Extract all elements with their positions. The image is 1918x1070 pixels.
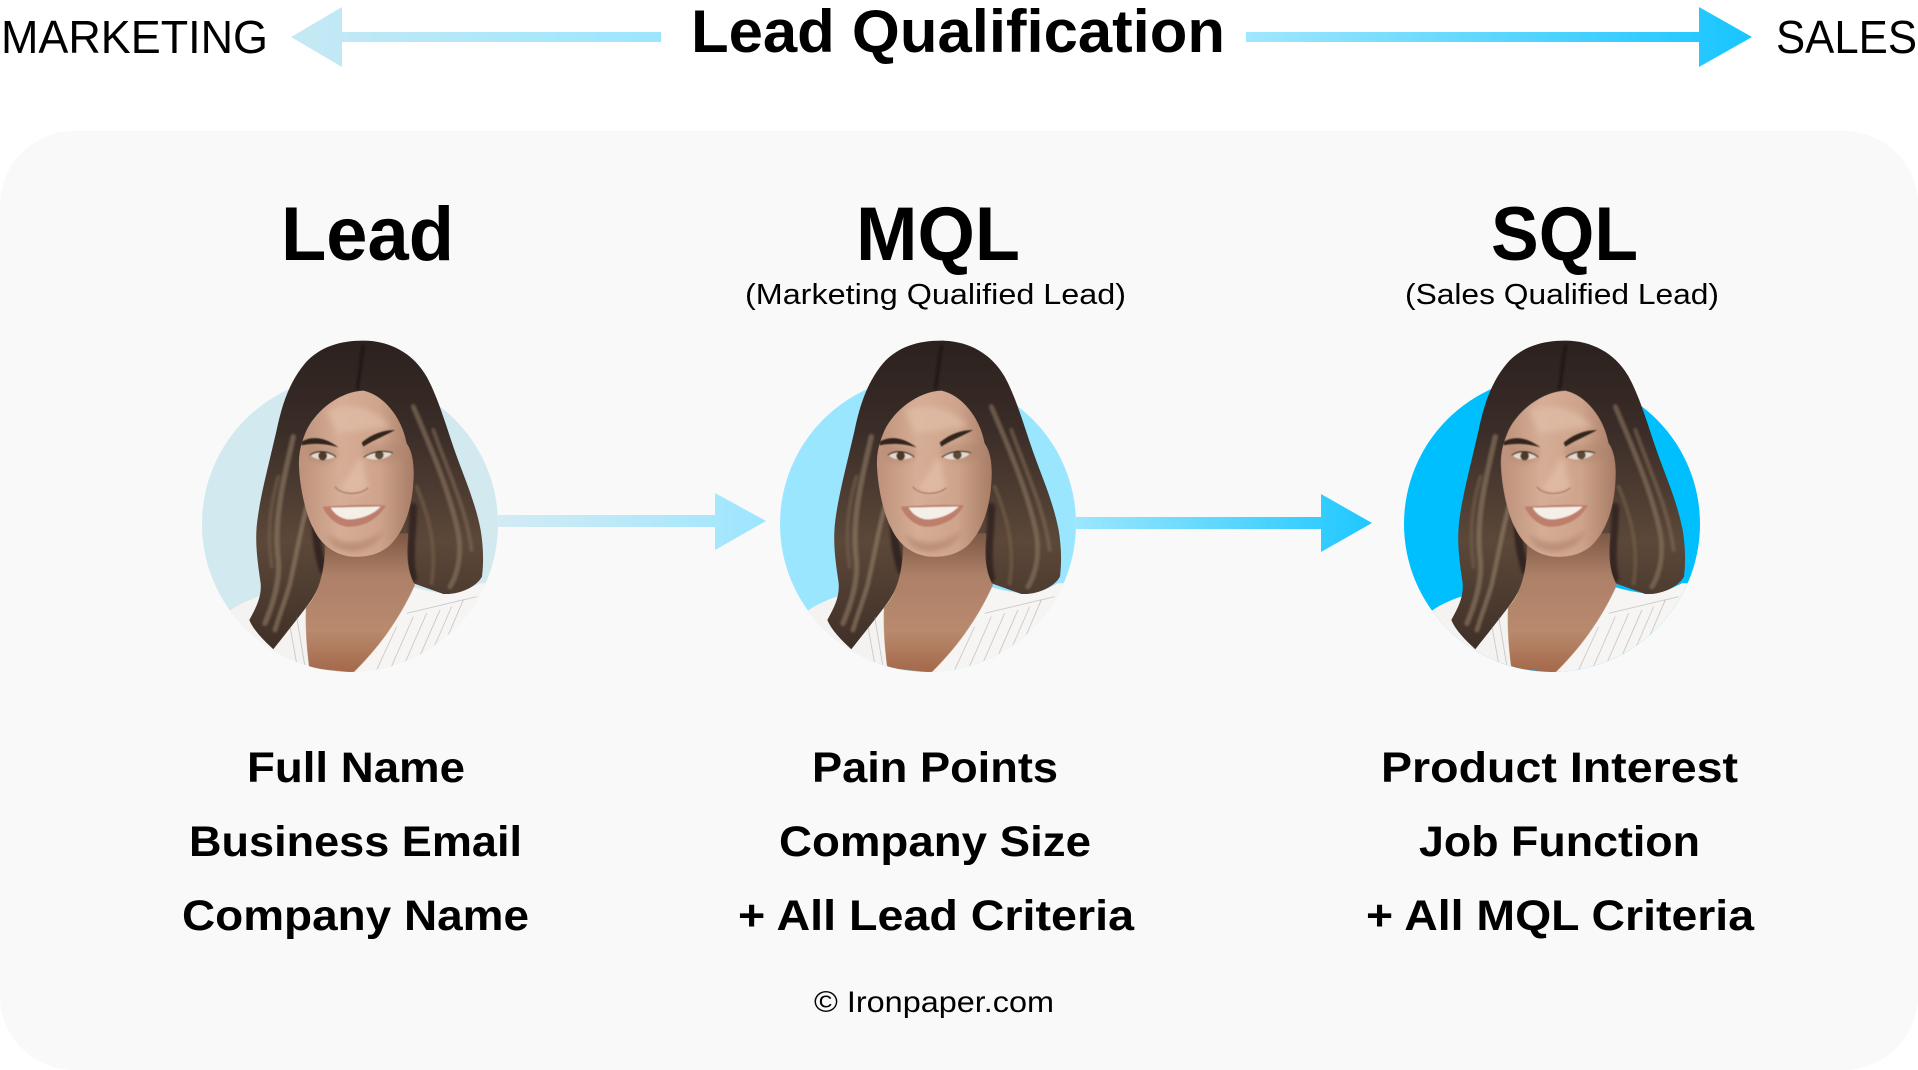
- criteria list: Lead: [182, 744, 529, 940]
- criteria list: SQL: Job Function: [1419, 818, 1700, 866]
- criteria list: Lead: Full Name: [247, 744, 465, 792]
- column: MQL: [738, 192, 1135, 940]
- criteria list: MQL: [738, 744, 1135, 940]
- arrow: MQL to SQL: [1076, 494, 1372, 552]
- criteria list: MQL: Pain Points: [812, 744, 1058, 792]
- criteria list: SQL: [1366, 744, 1755, 940]
- heading: MQL: MQL: [856, 192, 1020, 277]
- arrow: Lead to MQL: [498, 493, 766, 550]
- arrow: toward marketing: [291, 7, 661, 67]
- marketing label: MARKETING: [1, 11, 268, 63]
- criteria list: MQL: Company Size: [779, 818, 1091, 866]
- portrait: Lead: [202, 341, 503, 673]
- criteria list: SQL: + All MQL Criteria: [1366, 892, 1755, 940]
- column: Lead: [182, 192, 529, 940]
- heading: SQL: SQL: [1491, 192, 1638, 277]
- criteria list: SQL: Product Interest: [1381, 744, 1738, 792]
- subheading: MQL: (Marketing Qualified Lead): [745, 279, 1126, 311]
- subheading: SQL: (Sales Qualified Lead): [1405, 279, 1719, 311]
- arrow: toward sales: [1246, 7, 1752, 67]
- criteria list: Lead: Business Email: [189, 818, 522, 866]
- criteria list: Lead: Company Name: [182, 892, 529, 940]
- criteria list: MQL: + All Lead Criteria: [738, 892, 1135, 940]
- portrait: SQL: [1404, 341, 1705, 673]
- column: SQL: [1366, 192, 1755, 940]
- title: Lead Qualification: [691, 0, 1225, 65]
- heading: Lead: Lead: [281, 192, 454, 277]
- portrait: MQL: [780, 341, 1081, 673]
- copyright: © Ironpaper.com: [814, 986, 1054, 1019]
